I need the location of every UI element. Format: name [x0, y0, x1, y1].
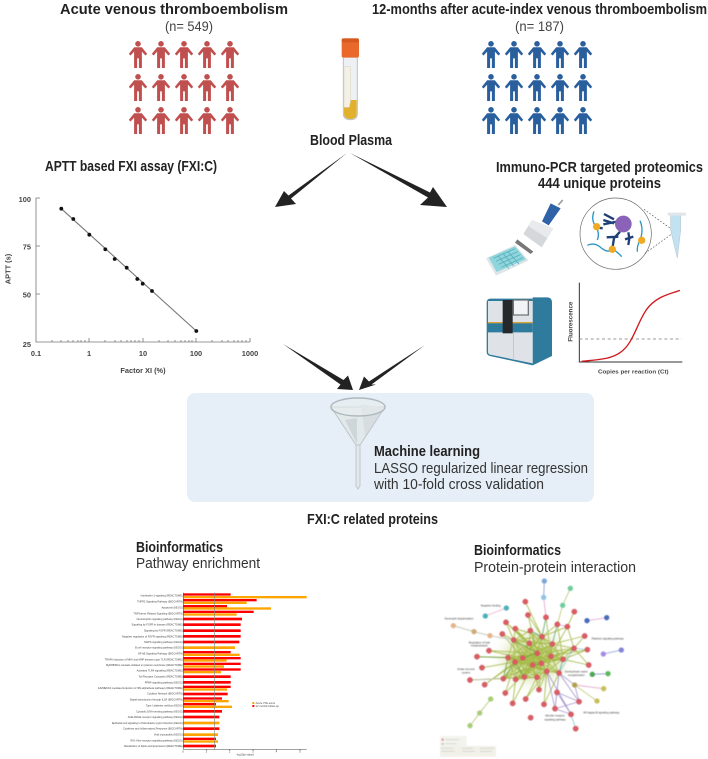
text: machine learning description: Machine learning — [374, 443, 480, 460]
network labels: metabolization — [471, 644, 488, 648]
chart: APTT versus factor XI: 50 — [23, 290, 31, 300]
panel: machine learning — [187, 393, 594, 502]
chart: pathway enrichment bars: Cytokine Network (BIOCARTA) — [147, 692, 183, 696]
chart: pathway enrichment bars: 4 — [276, 749, 278, 753]
chart: pathway enrichment bars: RIG-I-like receptor signaling pathway (KEGG) — [131, 738, 183, 742]
arrow: assay to machine learning — [283, 344, 353, 390]
chart: pathway enrichment bars: Signaling by FGFR in disease (REACTOME) — [132, 623, 183, 627]
heading: FXI:C related proteins: FXI:C related proteins — [307, 511, 438, 528]
heading: 12 months after venous thromboembolism — [372, 1, 707, 34]
network nodes: coloured satellite clusters — [451, 578, 624, 728]
chart: pathway enrichment bars: Viral myocarditis (KEGG) — [154, 733, 183, 737]
chart: pathway enrichment bars: Metabolism of lipids and lipoproteins (REACTOME) — [124, 744, 183, 748]
heading: acute venous thromboembolism: Acute venous thromboembolism — [60, 1, 288, 18]
illustration: PCR instrument — [487, 297, 552, 365]
chart: pathway enrichment bars: IκK/MEKK4 mediated induction of IFN-alpha/beta pathways (REACTOME) — [98, 686, 183, 690]
heading: immuno-PCR proteomics: 444 unique proteins — [538, 175, 661, 192]
chart: APTT versus factor XI: 25 — [23, 340, 31, 349]
network labels: signaling pathway — [544, 717, 566, 721]
icon group: blue patients — [482, 41, 592, 134]
chart: pathway enrichment bars: Type I diabetes mellitus (KEGG) — [146, 703, 183, 707]
heading: bioinformatics pathway enrichment — [136, 539, 260, 572]
illustration: multichannel pipette and plate — [486, 200, 563, 276]
chart: pathway enrichment bars — [98, 593, 307, 757]
chart: pathway enrichment bars: Cytosolic DNA-sensing pathway (KEGG) — [136, 709, 183, 713]
arrow: plasma to proteomics — [350, 153, 447, 207]
icon group: red patients — [129, 41, 239, 134]
chart: pathway enrichment bars: 0 — [182, 749, 184, 753]
network labels: Regulation of lipid — [469, 640, 490, 644]
label: blood plasma: Blood Plasma — [310, 132, 393, 149]
arrow: proteomics to machine learning — [359, 345, 425, 390]
network labels: system — [462, 670, 471, 674]
chart: APTT versus factor XI: 75 — [23, 242, 31, 252]
chart: APTT versus factor XI: APTT (s) — [4, 253, 12, 284]
chart: pathway enrichment bars: B cell receptor signaling pathway (KEGG) — [135, 646, 183, 650]
network labels: reorganization — [568, 673, 585, 677]
text: machine learning description: with 10-fold cross validation — [373, 477, 544, 493]
chart: pathway enrichment bars: 12 months follow-up — [256, 704, 279, 708]
network labels — [445, 603, 624, 721]
text: machine learning description: LASSO regularized linear regression — [374, 461, 588, 477]
chart: APTT versus factor XI: 0.1 — [31, 349, 41, 358]
chart: pathway enrichment bars: Cytokines and Inflammatory Response (BIOCARTA) — [123, 727, 183, 731]
chart: pathway enrichment bars: PPAR signaling pathway (KEGG) — [145, 680, 183, 684]
heading: 12 months after venous thromboembolism: (n= 187) — [515, 18, 564, 34]
chart: pathway enrichment bars: Neurotrophin signaling pathway (KEGG) — [137, 617, 183, 621]
network labels: Nitrobic receptor — [545, 714, 565, 718]
illustration: proximity antibody assay zoom circle — [580, 198, 686, 269]
chart: pathway enrichment bars: NF-kB Signaling Pathway (BIOCARTA) — [138, 651, 183, 655]
icon: blood plasma tube — [342, 38, 359, 120]
chart: APTT versus factor XI: Factor XI (%) — [120, 366, 166, 375]
chart: pathway enrichment bars: Interleukin-1 signaling (REACTOME) — [141, 594, 183, 598]
chart: pathway enrichment bars: Acute VTE event — [256, 701, 275, 705]
chart: pathway enrichment bars: 2 — [229, 749, 231, 753]
network labels: Extracellular matrix — [565, 670, 588, 674]
heading: bioinformatics protein-protein interaction — [474, 542, 636, 576]
chart: APTT versus factor XI: 100 — [19, 195, 31, 204]
chart: pathway enrichment bars: MAPK signaling pathway (KEGG) — [144, 640, 183, 644]
chart: APTT versus factor XI: 1000 — [242, 349, 258, 358]
chart: amplification curve: Fluorescence — [569, 301, 575, 342]
chart: pathway enrichment bars: 5 — [299, 749, 301, 753]
chart: pathway enrichment bars: TRAF6 induction of MKK and MAP kinases upon TLR (REACTOME) — [105, 657, 183, 661]
network labels: Neutrophil degranulation — [445, 616, 474, 620]
heading: acute venous thromboembolism — [60, 1, 288, 34]
chart: APTT versus factor XI: 100 — [190, 349, 202, 358]
network nodes: red cluster — [467, 599, 591, 731]
chart: APTT versus factor XI: 1 — [87, 349, 91, 358]
heading: bioinformatics protein-protein interaction: Protein-protein interaction — [474, 560, 636, 576]
heading: bioinformatics pathway enrichment: Bioinformatics — [136, 539, 223, 556]
chart: pathway enrichment bars: MyD88/MAL cascade initiated on plasma membrane (REACTOME) — [106, 663, 183, 667]
chart: pathway enrichment bars: Signal transduction through IL1R (BIOCARTA) — [130, 698, 183, 702]
chart: pathway enrichment bars: TNFR2 Signaling Pathway (BIOCARTA) — [137, 600, 183, 604]
chart: amplification curve: Copies per reaction (Ct) — [598, 369, 669, 375]
chart: pathway enrichment bars: Toll Receptor Cascades (REACTOME) — [138, 675, 183, 679]
arrow: plasma to FXI assay — [275, 153, 347, 207]
chart: pathway enrichment bars: TNF/Stress Related Signaling (BIOCARTA) — [133, 611, 183, 615]
text: machine learning description — [373, 443, 588, 493]
chart: APTT versus factor XI: 10 — [139, 349, 147, 358]
heading: immuno-PCR proteomics — [496, 159, 703, 192]
network labels: NF-kappa B signaling pathway — [583, 710, 620, 714]
chart: pathway enrichment bars: Activated TLR4 signalling (REACTOME) — [137, 668, 183, 672]
network labels: Negative binding — [481, 603, 501, 607]
chart: pathway enrichment bars: Negative regulation of FGFR signaling (REACTOME) — [122, 634, 183, 638]
heading: bioinformatics protein-protein interaction: Bioinformatics — [474, 542, 561, 559]
icon: funnel — [331, 398, 385, 489]
chart: pathway enrichment bars: 3 — [252, 749, 254, 753]
chart: pathway enrichment bars: Apoptosis (KEGG) — [161, 605, 183, 609]
chart: pathway enrichment bars: Epithelial cell signaling in Helicobacter pylori infection (KEGG) — [112, 721, 183, 725]
chart: APTT versus factor XI — [4, 195, 258, 375]
chart: pathway enrichment bars: Signaling by FGFR (REACTOME) — [144, 629, 183, 633]
heading: bioinformatics pathway enrichment: Pathway enrichment — [136, 556, 260, 572]
chart: pathway enrichment bars: 1 — [206, 749, 208, 753]
diagram: protein interaction network — [440, 578, 624, 757]
chart: pathway enrichment bars: AGE-RAGE receptor signaling pathway (KEGG) — [128, 715, 183, 719]
network labels: Platelets signaling pathway — [592, 636, 624, 640]
network labels: Innate immune — [457, 667, 475, 671]
chart: pathway enrichment bars: -log10(p-value) — [236, 753, 254, 757]
chart: amplification curve — [569, 283, 682, 375]
heading: APTT assay: APTT based FXI assay (FXI:C) — [45, 158, 217, 175]
heading: acute venous thromboembolism: (n= 549) — [165, 18, 213, 34]
network legend — [440, 736, 496, 757]
